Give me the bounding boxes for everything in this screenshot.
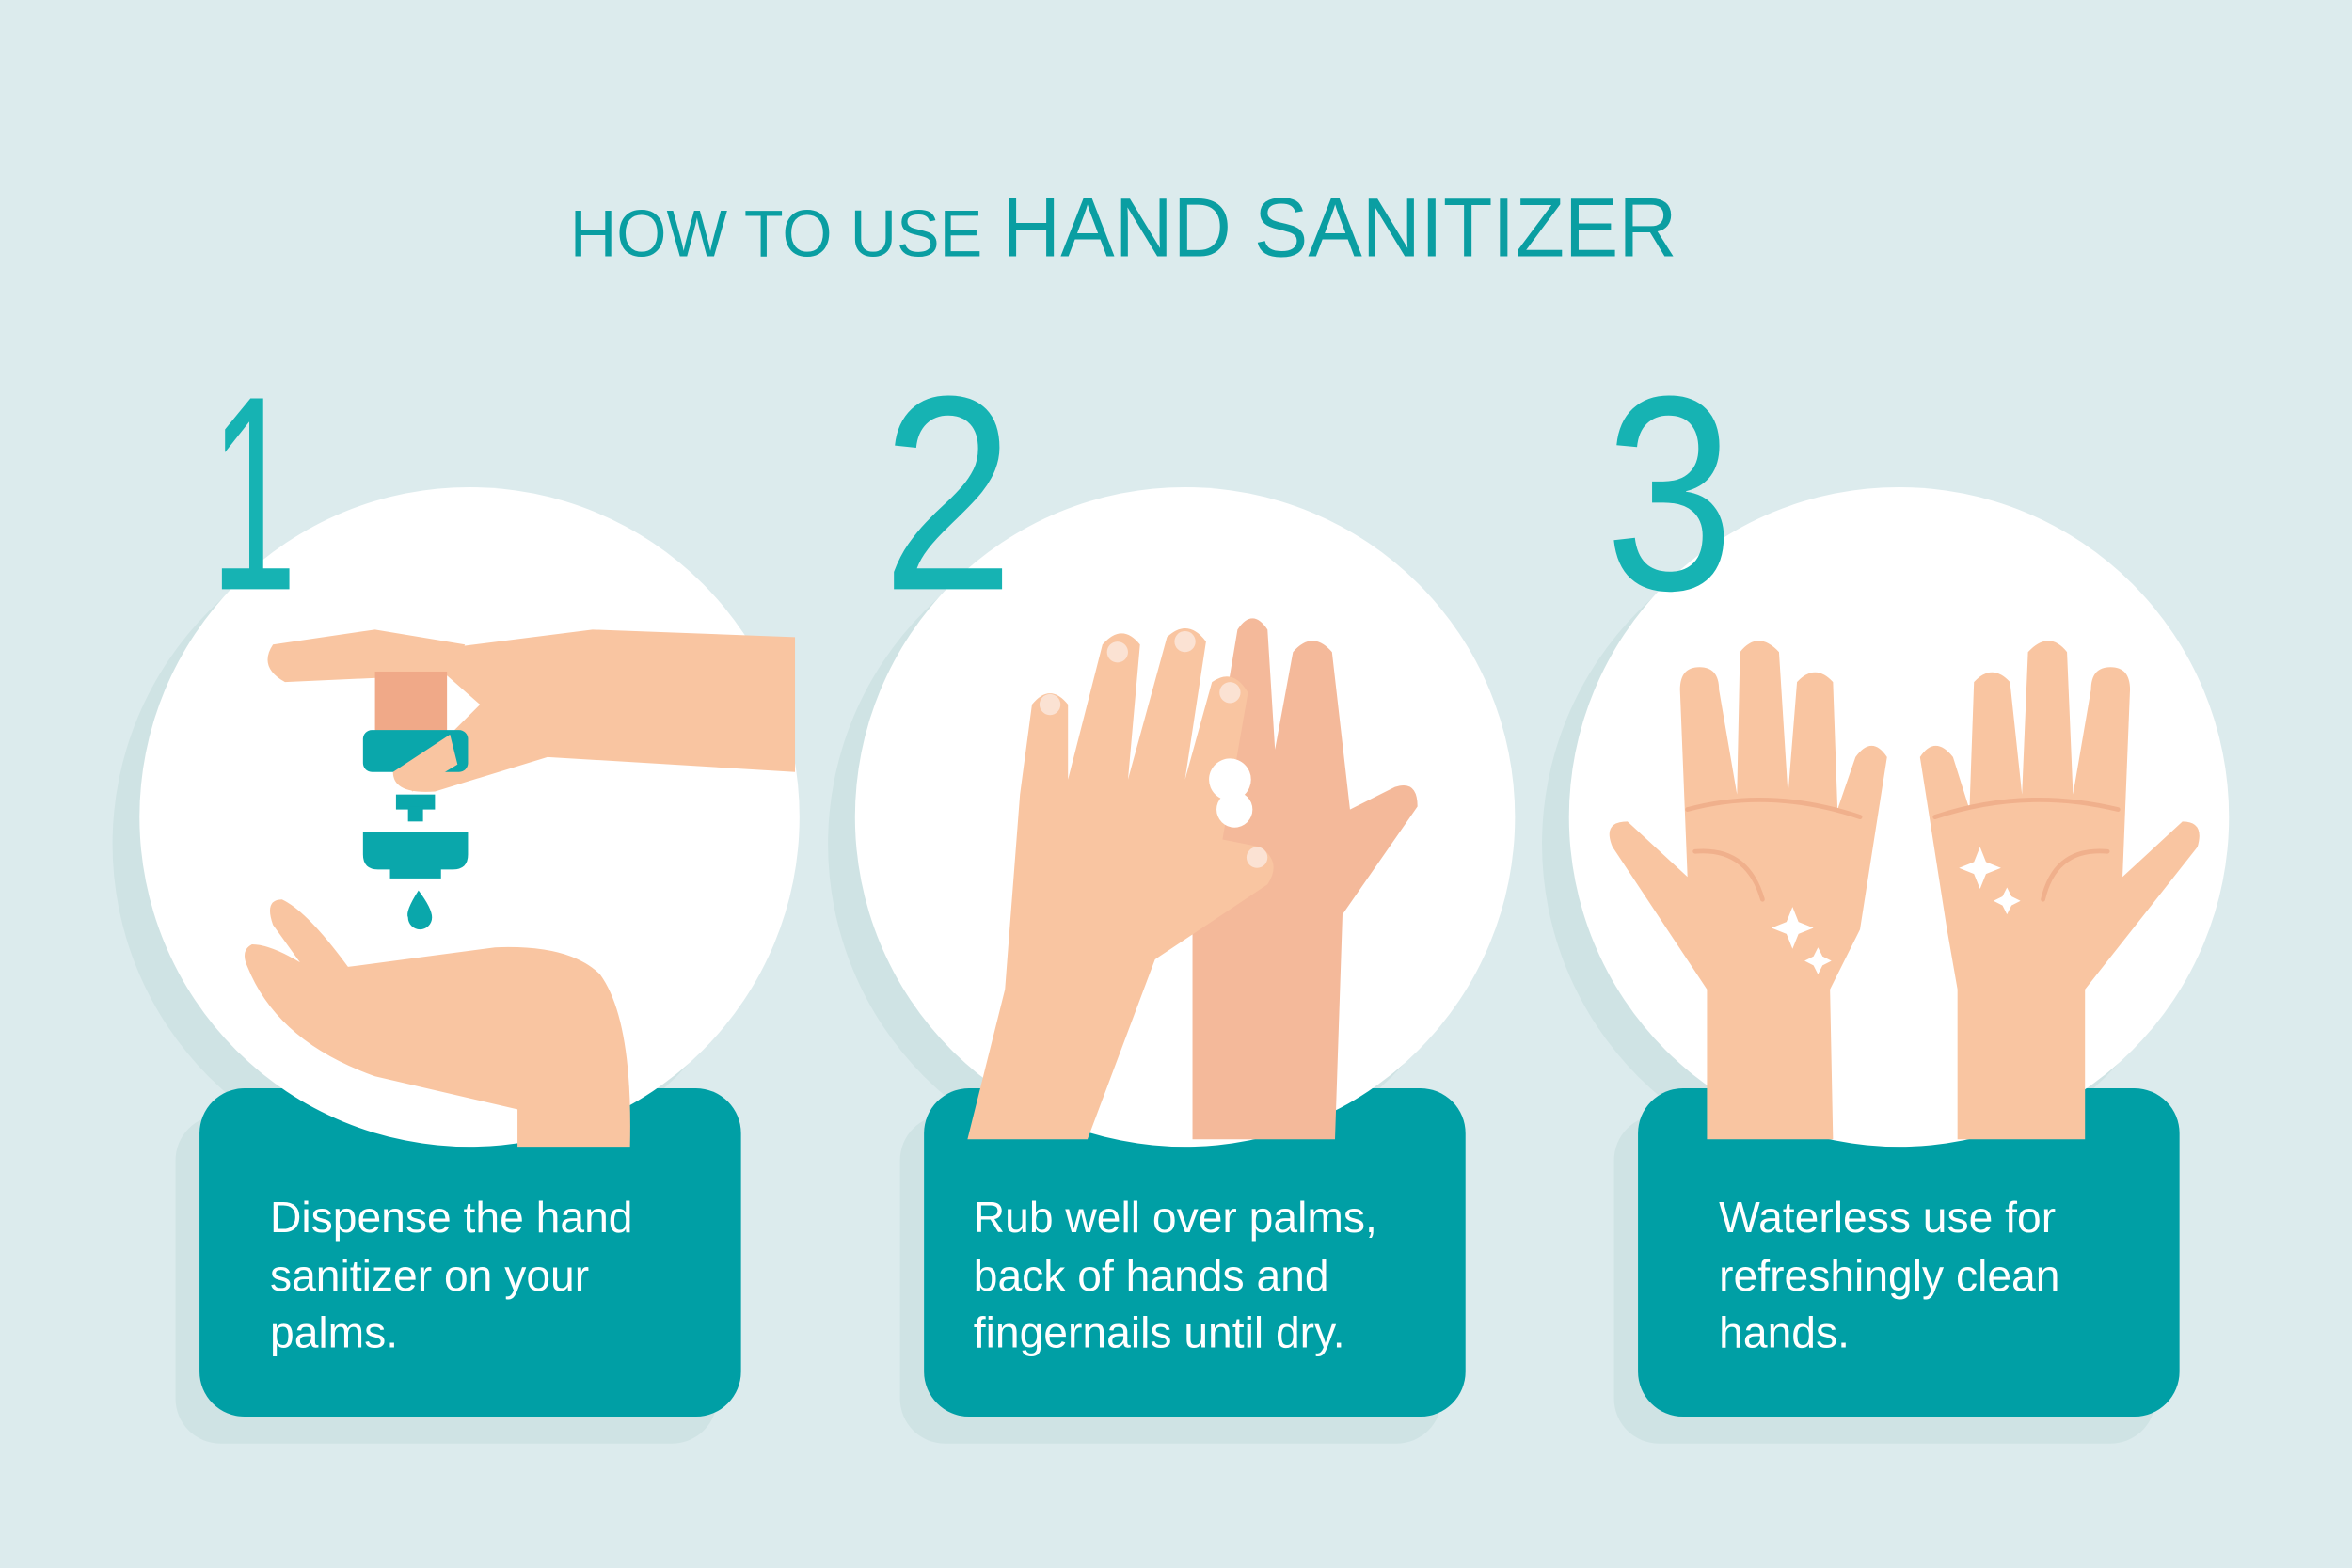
panel: step 2 bbox=[828, 339, 1515, 1444]
panel: step 1 bbox=[113, 339, 800, 1444]
text: step 3: Waterless use for bbox=[1719, 1193, 2056, 1242]
illustration: dispensing bbox=[245, 629, 795, 1147]
palm lines bbox=[1688, 800, 2118, 899]
number 3: 3 bbox=[1605, 339, 1734, 648]
title: HOW TO USE bbox=[570, 198, 982, 271]
text: step 1: sanitizer on your bbox=[270, 1251, 589, 1300]
illustration: rubbing hands bbox=[967, 618, 1418, 1139]
text: step 3: refreshingly clean bbox=[1719, 1251, 2059, 1300]
illustration: clean hands bbox=[1610, 641, 2200, 1139]
icon: sparkles bbox=[1772, 847, 2021, 974]
text: step 1: Dispense the hand bbox=[270, 1193, 633, 1242]
text: step 3: hands. bbox=[1719, 1308, 1850, 1357]
text: step 2: Rub well over palms, bbox=[974, 1193, 1377, 1242]
text: step 1: palms. bbox=[270, 1308, 398, 1357]
number 2: 2 bbox=[882, 339, 1014, 648]
title bbox=[570, 181, 1677, 275]
text: step 2: back of hands and bbox=[974, 1251, 1329, 1300]
number 1: 1 bbox=[210, 339, 297, 648]
text: step 2: fingernails until dry. bbox=[974, 1308, 1345, 1357]
panel: step 3 bbox=[1542, 339, 2229, 1444]
title: HAND SANITIZER bbox=[1002, 181, 1677, 275]
